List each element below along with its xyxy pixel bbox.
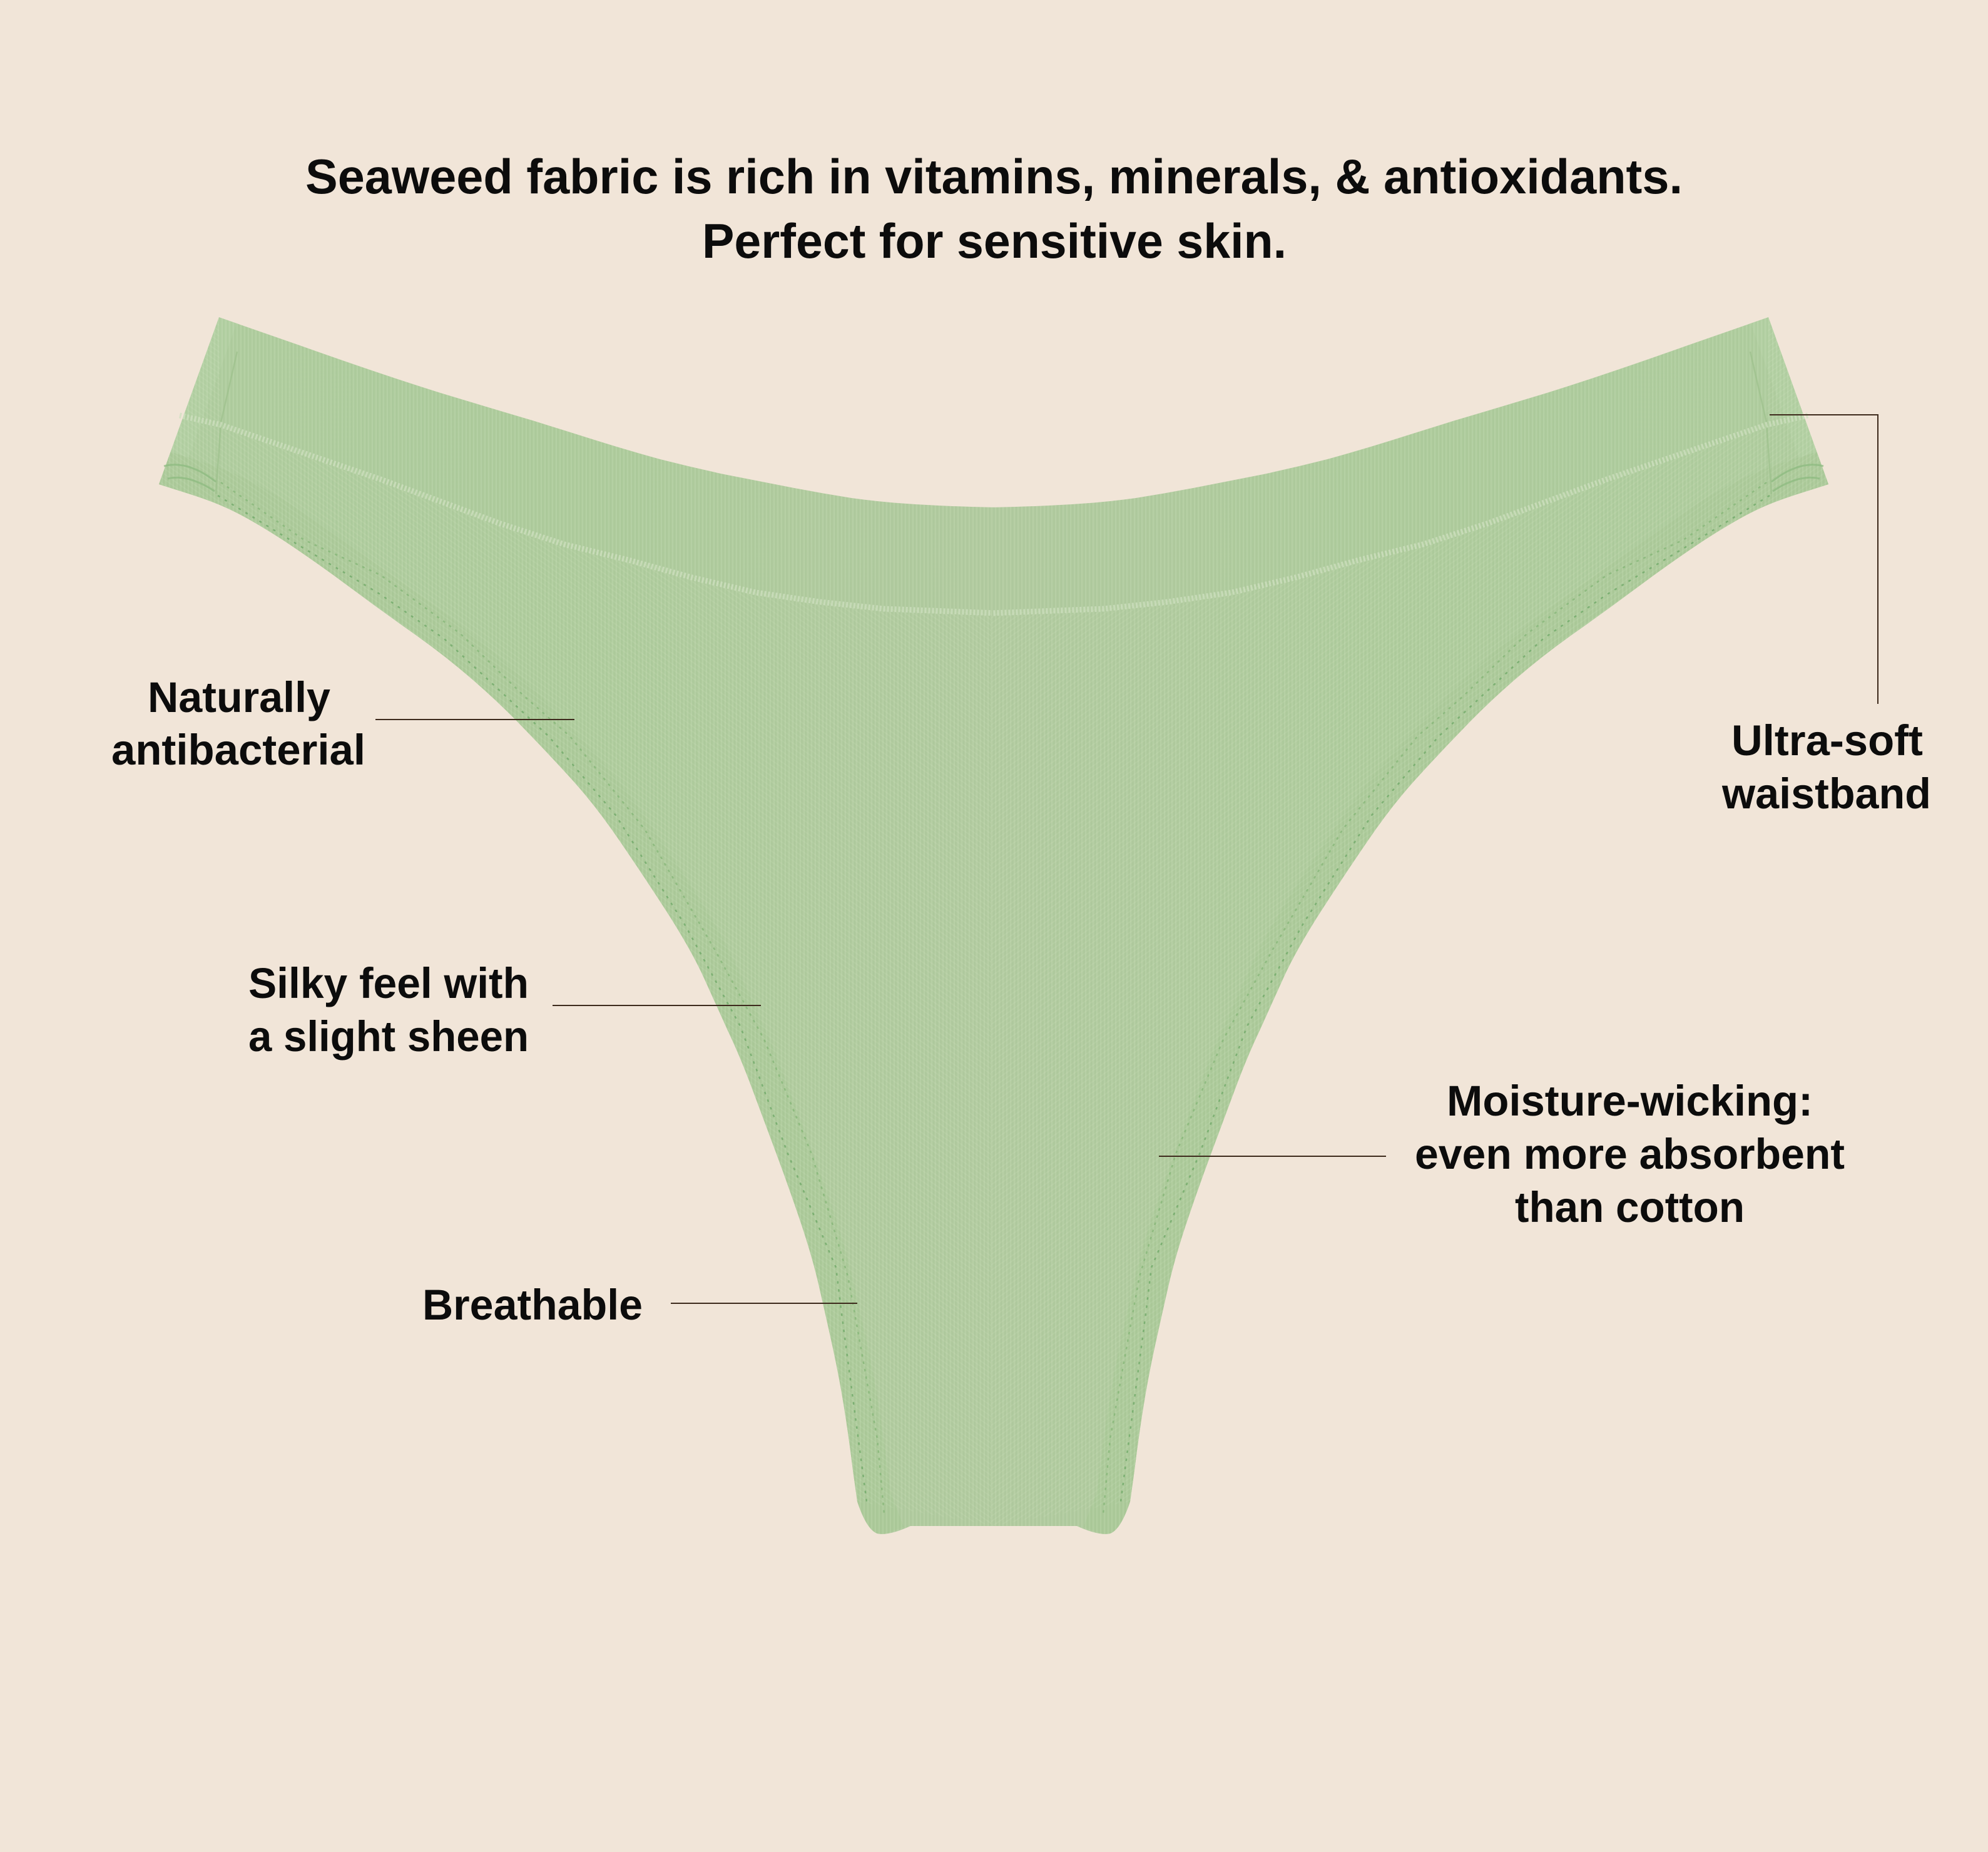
callout: silky feel: a slight sheen bbox=[248, 1012, 529, 1061]
callout: moisture-wicking: Moisture-wicking: bbox=[1447, 1077, 1813, 1125]
callout: ultra-soft waistband: Ultra-soft bbox=[1731, 716, 1923, 765]
callout: silky feel bbox=[248, 959, 761, 1061]
callout: naturally antibacterial: Naturally bbox=[148, 673, 330, 721]
garment: seaweed fabric thong bbox=[125, 282, 1862, 1539]
callout: moisture-wicking: even more absorbent bbox=[1415, 1130, 1845, 1178]
callout: moisture-wicking bbox=[1159, 1077, 1845, 1231]
callout: ultra-soft waistband: waistband bbox=[1721, 770, 1931, 818]
callout: breathable: Breathable bbox=[422, 1281, 643, 1329]
title bbox=[305, 149, 1683, 268]
callout: ultra-soft waistband bbox=[1721, 415, 1931, 818]
title: Perfect for sensitive skin. bbox=[702, 213, 1287, 268]
callout: naturally antibacterial: antibacterial bbox=[111, 726, 365, 774]
callout: naturally antibacterial bbox=[111, 673, 574, 774]
title: Seaweed fabric is rich in vitamins, minerals, & antioxidants. bbox=[305, 149, 1683, 204]
callout: moisture-wicking: than cotton bbox=[1515, 1183, 1745, 1231]
callout: silky feel: Silky feel with bbox=[248, 959, 529, 1007]
